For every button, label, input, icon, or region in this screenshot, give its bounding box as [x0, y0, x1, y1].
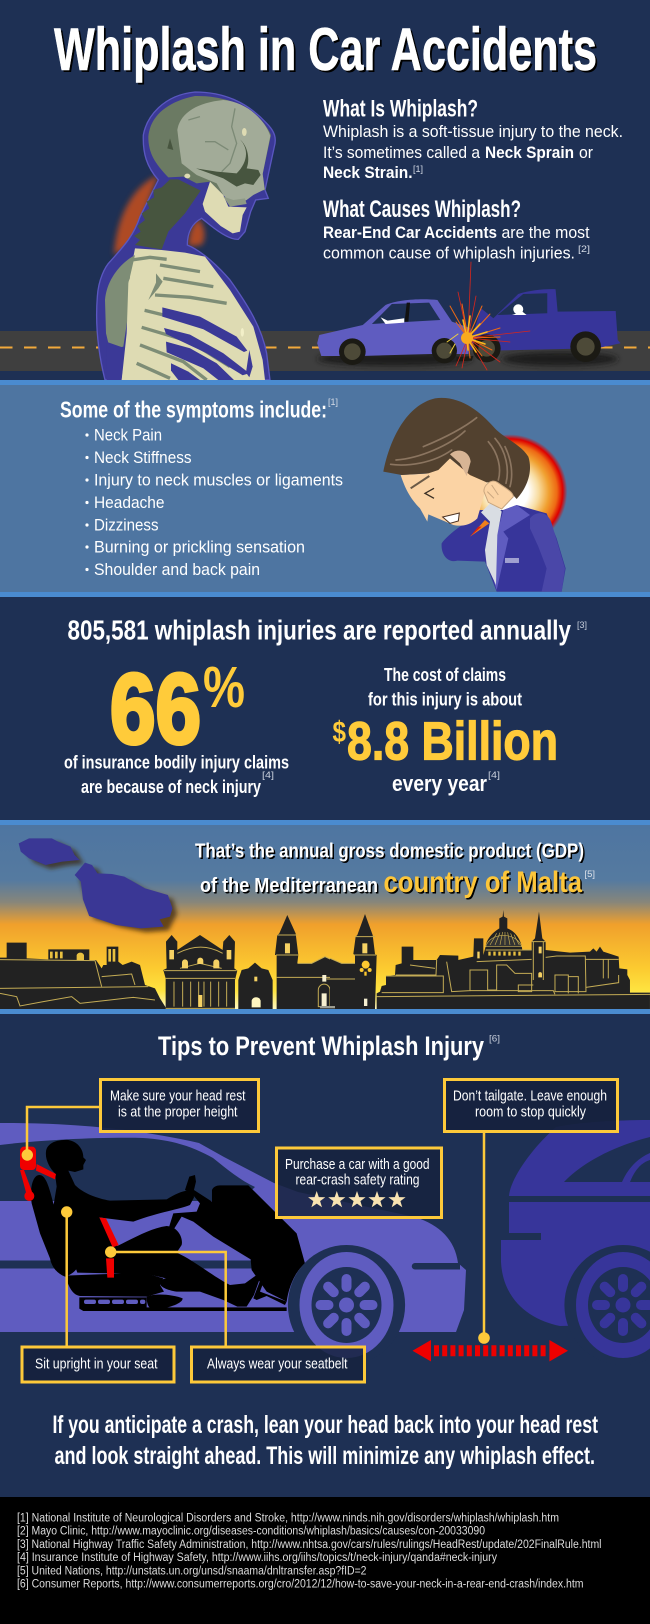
heading: GDP comparison: country of Malta: [385, 868, 584, 900]
road: [0, 331, 650, 371]
symptom list: Headache: [94, 493, 164, 512]
panel: references: [6] Consumer Reports, http://www.consumerreports.org/cro/2012/12/how-to-save-your-neck-in-a-rear-end-crash/index.htm: [17, 1579, 584, 1591]
stat: cost of claims: 8.8 Billion: [347, 712, 558, 772]
skyline left: [0, 915, 338, 1009]
rib cage: [122, 248, 265, 380]
stat: cost of claims: [332, 664, 558, 796]
callout dots: [22, 1149, 490, 1344]
divider stripe: [0, 820, 650, 825]
text: definition: It’s sometimes called a: [323, 143, 480, 162]
panel: Malta GDP: [0, 825, 650, 1009]
text: definition: Whiplash is a soft-tissue injury to the neck.: [323, 122, 623, 141]
body outline: [97, 92, 275, 380]
hand: [484, 481, 513, 509]
stat: 66 percent: [64, 653, 289, 797]
panel: references: [1] National Institute of Neurological Disorders and Stroke, http://www.ninds.nih.gov/disorders/whiplash/whiplash.htm: [17, 1513, 559, 1525]
divider stripe: [0, 380, 650, 385]
callout: tailgating: room to stop quickly: [475, 1104, 587, 1120]
stat: cost of claims: $: [332, 716, 346, 749]
stat: cost of claims: [4]: [488, 770, 500, 780]
stat: cost of claims: for this injury is about: [368, 688, 522, 710]
text: causes: [2]: [578, 244, 590, 254]
stat: 66 percent: of insurance bodily injury claims: [64, 752, 289, 772]
symptom list: Injury to neck muscles or ligaments: [94, 471, 343, 490]
callout: head rest: [100, 1080, 258, 1132]
illustration: skeleton with injured neck: [97, 92, 275, 380]
flame under chin: [470, 520, 489, 537]
following car: [501, 1120, 650, 1326]
stat: 66 percent: %: [203, 655, 245, 720]
divider stripe: [0, 592, 650, 597]
illustration: rear-end collision: [317, 262, 621, 370]
skyline right: [320, 910, 650, 1009]
stat: cost of claims: every year: [392, 771, 487, 796]
ear: [450, 451, 471, 476]
heading: tips: [6]: [489, 1034, 500, 1044]
text: definition: [323, 122, 623, 182]
neck pain glow: [114, 175, 205, 255]
callout: tailgating: [444, 1080, 618, 1132]
callout leaders: [27, 1107, 484, 1346]
panel: symptoms: [0, 385, 650, 592]
text: definition: Neck Strain.: [323, 163, 412, 182]
heading: symptoms: [1]: [328, 397, 338, 407]
symptom list: Dizziness: [94, 515, 158, 534]
text: causes: are the most: [502, 223, 590, 242]
heading: symptoms: Some of the symptoms include:: [60, 396, 327, 422]
heading: what is whiplash: What Is Whiplash?: [323, 96, 478, 122]
panel: references: [5] United Nations, http://unstats.un.org/unsd/snaama/dnltransfer.asp?fID=2: [17, 1565, 366, 1577]
facial expression: [411, 476, 429, 488]
text: definition: Neck Sprain: [485, 143, 574, 162]
dashboard: [168, 1175, 305, 1302]
heading: GDP comparison: country of Malta: [384, 866, 582, 899]
small church: [238, 963, 273, 1009]
hair: [383, 398, 530, 499]
lead car wheel: [288, 1245, 405, 1365]
skull: [148, 96, 271, 200]
stat: cost of claims: The cost of claims: [384, 664, 506, 685]
car shadows: [317, 352, 618, 366]
shirt and tie: [481, 501, 502, 585]
heading: annual injuries: [3]: [577, 620, 587, 630]
panel: references: [4] Insurance Institute of Highway Safety, http://www.iihs.org/iihs/topics/t/neck-injury/qanda#neck-injury: [17, 1552, 497, 1564]
callout: head rest: Make sure your head rest: [110, 1089, 246, 1105]
illustration: person holding neck: [383, 398, 567, 592]
suit: [442, 505, 566, 592]
callout: sit upright: Sit upright in your seat: [35, 1356, 158, 1372]
callout: safety rating: rear-crash safety rating: [296, 1173, 420, 1189]
heading: what causes whiplash: What Causes Whiplash?: [323, 196, 521, 223]
rib gaps: [106, 307, 253, 380]
map of Malta: [19, 838, 177, 932]
lead car body: [0, 1123, 466, 1332]
following car wheel: [564, 1245, 650, 1365]
wheels: [339, 331, 601, 365]
heading: GDP comparison: That’s the annual gross domestic product (GDP): [196, 842, 586, 864]
seat rail and foot: [79, 1297, 287, 1311]
cathedral tower left and nave: [275, 915, 338, 1009]
callout: head rest: is at the proper height: [118, 1104, 238, 1120]
callout: seatbelt: Always wear your seatbelt: [207, 1356, 348, 1372]
text: causes: [323, 223, 590, 262]
callout: sit upright: [22, 1347, 174, 1382]
panel: references: [2] Mayo Clinic, http://www.mayoclinic.org/diseases-conditions/whiplash/basics/causes/con-20033090: [17, 1526, 485, 1538]
divider stripe: [0, 1009, 650, 1014]
jaw: [203, 182, 247, 233]
text: definition: or: [579, 143, 593, 162]
seat: [31, 1175, 79, 1277]
arrow: following distance: [412, 1340, 568, 1362]
symptom list: Shoulder and back pain: [94, 560, 260, 579]
symptom list: Neck Stiffness: [94, 448, 192, 467]
stat: 66 percent: are because of neck injury: [81, 776, 262, 797]
callout: seatbelt: [192, 1347, 364, 1382]
five stars: [308, 1191, 406, 1207]
face: [401, 458, 487, 526]
impact sparks: [447, 262, 530, 370]
driver body: [46, 1140, 259, 1307]
text: causes: common cause of whiplash injuries.: [323, 244, 575, 262]
symptom list: [85, 426, 343, 579]
panel: references: [0, 1497, 650, 1624]
heading: GDP comparison: That’s the annual gross domestic product (GDP): [195, 840, 584, 862]
symptom list: Burning or prickling sensation: [94, 538, 305, 557]
illustration: car and driver: [0, 1120, 650, 1365]
shoulder bone: [122, 270, 156, 380]
panel: references: [3] National Highway Traffic Safety Administration, http://www.nhtsa.gov/cars/rules/rulings/HeadRest/update/202FinalRule.html: [17, 1539, 602, 1551]
heading: GDP comparison: [5]: [584, 869, 595, 879]
callout: safety rating: Purchase a car with a good: [285, 1157, 430, 1173]
heading: GDP comparison: [195, 840, 595, 900]
text: crash advice: [52, 1411, 598, 1470]
callout: tailgating: Don’t tailgate. Leave enough: [453, 1089, 607, 1105]
heading: GDP comparison: of the Mediterranean: [200, 875, 378, 897]
pickup truck: [468, 289, 621, 351]
stat: 66 percent: 66: [110, 653, 201, 764]
text: definition: [1]: [413, 164, 423, 174]
rib shading: [132, 257, 237, 380]
callout: safety rating: [276, 1148, 442, 1218]
Mosta rotunda: [163, 935, 237, 1009]
symptom list: Neck Pain: [94, 426, 162, 445]
head rest and seat belt: [20, 1147, 119, 1278]
heading: tips: Tips to Prevent Whiplash Injury: [158, 1031, 484, 1061]
text: causes: Rear-End Car Accidents: [323, 223, 497, 242]
blue car: [317, 299, 471, 356]
driver silhouette in seat: [20, 1140, 305, 1311]
stat: 66 percent: [4]: [262, 770, 274, 780]
heading: GDP comparison: of the Mediterranean: [202, 876, 380, 898]
neck vertebrae: [134, 179, 201, 249]
